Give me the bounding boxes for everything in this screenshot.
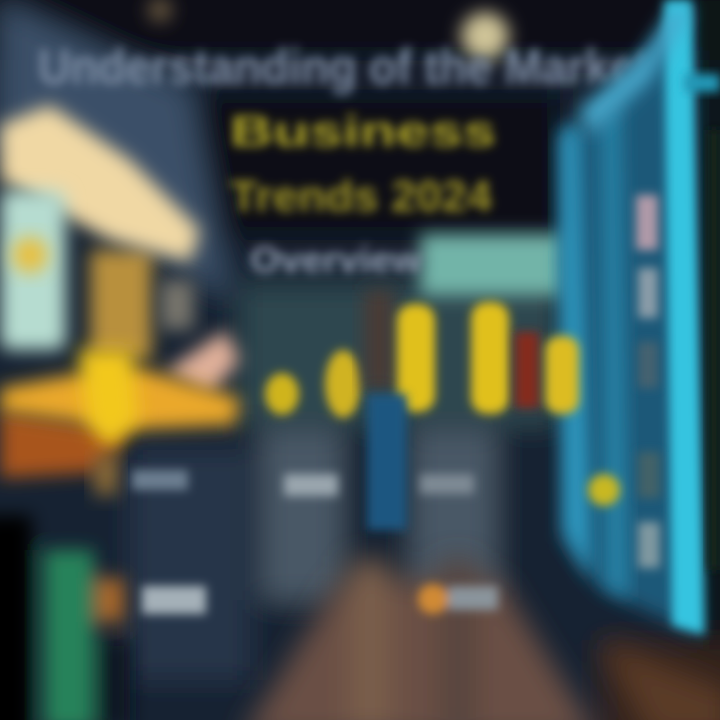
lower labels [132, 470, 498, 614]
bar 5 [545, 336, 579, 414]
panel: cyan glass wall [560, 0, 720, 635]
table wood [0, 412, 130, 478]
bar chart [265, 290, 579, 530]
bar 1 [265, 373, 299, 415]
ceiling lights [148, 0, 509, 60]
panel: subtitle strip [250, 234, 570, 296]
yellow panel mark [12, 237, 48, 273]
lamp stem [90, 250, 152, 360]
subtitle text: Overview [250, 239, 423, 280]
side shapes [160, 280, 194, 330]
teal panel [420, 234, 570, 296]
pale panel [0, 190, 66, 350]
wall tiles [636, 195, 658, 250]
left dark corner and green column [0, 515, 130, 720]
wall body [562, 0, 700, 635]
heading: yellow line one: Business [230, 107, 496, 156]
table leg [94, 455, 118, 495]
yellow dot [588, 474, 620, 506]
red bar [515, 332, 539, 408]
centre strut [602, 100, 628, 600]
floor [240, 560, 720, 720]
right arm [684, 74, 720, 92]
blue pillar [367, 394, 407, 530]
illustration: mushroom lamp and table [0, 105, 240, 495]
heading: yellow line two: Trends 2024 [230, 172, 493, 221]
dark red column [364, 290, 394, 390]
left edge [560, 120, 590, 580]
bar 3 [397, 304, 435, 412]
bar 4 [471, 302, 509, 414]
top brace [578, 10, 690, 135]
yellow centre piece [78, 350, 138, 450]
title: Understanding of the Market [38, 39, 650, 95]
right dark edge [708, 130, 720, 570]
bar 2 [325, 350, 361, 418]
lamp cap [0, 105, 200, 262]
table glow [0, 368, 240, 430]
outer edge [664, 0, 704, 635]
